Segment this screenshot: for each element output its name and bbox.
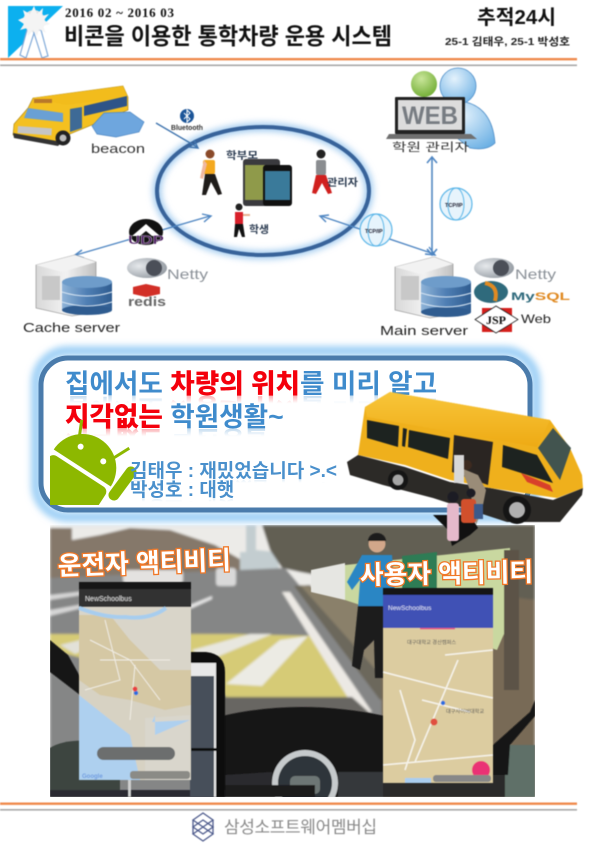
label: cache server: Cache server xyxy=(23,320,121,335)
icon: TCP/IP globe left xyxy=(360,214,392,246)
icon: TCP/IP globe right: TCP/IP xyxy=(445,203,463,209)
headline line 1: 집에서도 차량의 위치를 미리 알고 xyxy=(65,369,437,399)
user app screenshot: 대구사이버대학교 xyxy=(446,707,484,715)
user app screenshot: 대구대학교 경산캠퍼스 xyxy=(407,638,456,646)
icon: TCP/IP globe right xyxy=(440,188,472,220)
icon: cache server xyxy=(36,255,112,316)
photo: driver and user activity xyxy=(50,525,535,797)
scene background xyxy=(50,525,535,797)
header: ribbon badge xyxy=(8,6,63,58)
header: members: 25-1 김태우, 25-1 박성호 xyxy=(445,35,570,48)
driver app screenshot: NewSchoolbus xyxy=(85,596,132,603)
logo: Netty cache xyxy=(127,258,208,282)
icon: Bluetooth: Bluetooth xyxy=(171,125,203,132)
icon: smartphones xyxy=(243,159,292,206)
icon: UDP xyxy=(128,219,164,247)
arrow: web admin to main server xyxy=(427,157,437,255)
logo: redis: redis xyxy=(128,294,166,309)
label: administrator: 관리자 xyxy=(327,177,358,189)
label: student: 학생 xyxy=(249,223,269,236)
icon: android robot xyxy=(50,420,136,505)
icon: beacon device xyxy=(92,112,144,137)
header divider xyxy=(0,58,577,66)
photo: yellow school van with children xyxy=(347,392,583,546)
comment: Kim Tae-woo: 김태우 : 재밌었습니다 >.< xyxy=(130,461,337,482)
icon: parent figure xyxy=(200,150,222,195)
header: team name: 추적24시 xyxy=(477,6,556,29)
callout headline xyxy=(65,369,437,436)
comment: Park Seong-ho: 박성호 : 대햇 xyxy=(130,480,234,501)
logo: MySQL xyxy=(474,281,570,303)
icon: administrator figure xyxy=(312,150,332,194)
footer: organisation name: 삼성소프트웨어멤버십 xyxy=(224,818,377,837)
logo: Netty main: Netty xyxy=(515,266,556,282)
icon: student figure xyxy=(234,204,250,237)
caption: driver activity: 운전자 액티비티 xyxy=(57,546,231,581)
headline line 2: 지각없는 학원생활~ xyxy=(65,402,284,432)
diagram ring: mobile users xyxy=(157,127,369,255)
icon: Bluetooth xyxy=(171,109,203,132)
label: parent: 학부모 xyxy=(226,149,258,162)
driver app screenshot xyxy=(79,582,191,780)
footer: logo xyxy=(193,813,213,841)
driver app screenshot: Google xyxy=(82,774,103,780)
logo: JSP Web xyxy=(475,306,551,333)
user app screenshot: NewSchoolbus xyxy=(388,605,432,612)
logo: Netty main xyxy=(474,258,556,282)
person in blue jacket xyxy=(347,533,396,678)
arrow: beacon to users xyxy=(156,123,198,148)
header: date range: 2016 02 ~ 2016 03 xyxy=(65,5,174,20)
user app screenshot xyxy=(383,588,493,783)
label: academy administrator: 학원 관리자 xyxy=(392,140,470,154)
label: beacon: beacon xyxy=(91,141,145,156)
icon: UDP: UDP xyxy=(128,233,164,247)
caption: user activity: 사용자 액티비티 xyxy=(360,558,533,590)
footer divider xyxy=(0,802,577,811)
motorcycle dashboard xyxy=(50,640,535,797)
arrow: main server to users xyxy=(320,215,435,255)
icon: TCP/IP globe left: TCP/IP xyxy=(365,229,383,235)
icon: main server xyxy=(395,257,471,318)
icon: web admin users and laptop xyxy=(386,68,495,149)
callout comments xyxy=(130,461,337,501)
logo: JSP Web: JSP xyxy=(486,313,506,327)
logo: Netty cache: Netty xyxy=(167,266,208,282)
arrow: cache server to users xyxy=(75,214,211,258)
icon: web admin users and laptop: WEB xyxy=(402,102,458,130)
logo: JSP Web: Web xyxy=(521,312,551,326)
banner signs xyxy=(311,548,519,690)
header: title: 비콘을 이용한 통학차량 운용 시스템 xyxy=(64,23,392,49)
icon: yellow school bus xyxy=(13,86,128,146)
phone in holder xyxy=(128,652,225,797)
logo: redis xyxy=(128,284,166,309)
logo: MySQL: My SQL xyxy=(511,291,570,303)
label: main server: Main server xyxy=(380,323,469,338)
